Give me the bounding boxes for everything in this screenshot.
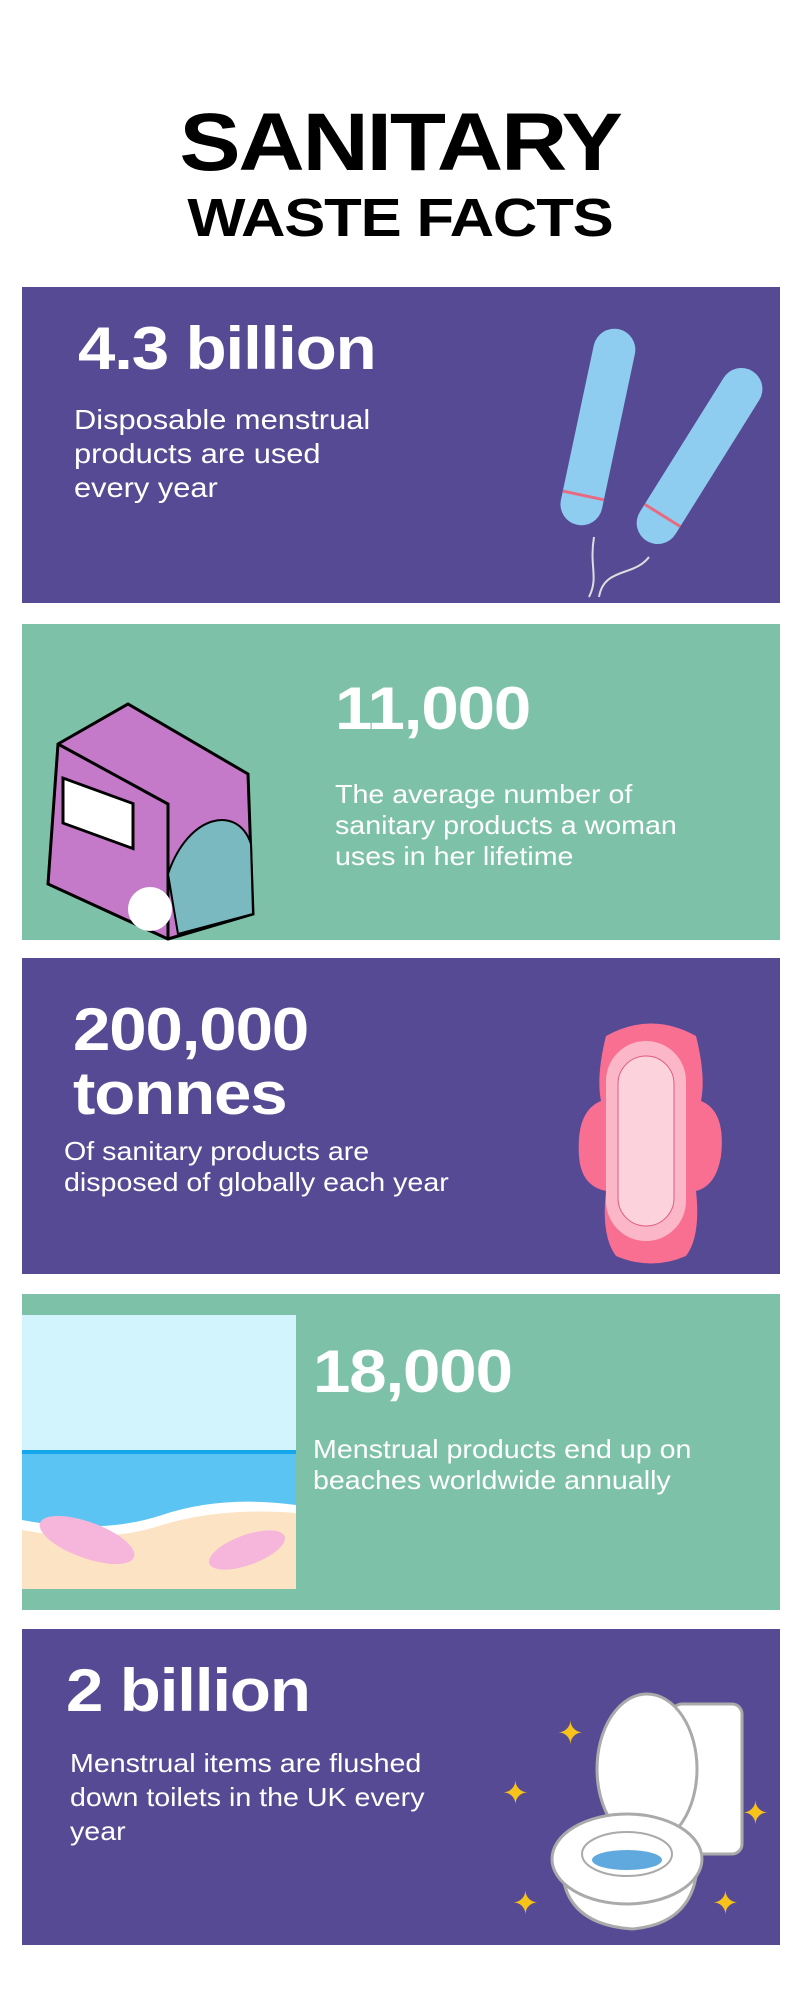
text: flushed: down toilets in the UK every (70, 1782, 425, 1812)
icon: toilet: ✦ (557, 1715, 584, 1751)
title: WASTE FACTS (187, 188, 613, 248)
text: beaches: beaches worldwide annually (313, 1465, 671, 1495)
text: disposed globally (64, 1136, 449, 1197)
stat: 11,000: 11,000 (335, 675, 530, 742)
text: flushed: Menstrual items are flushed (70, 1748, 421, 1778)
icon: toilet: ✦ (502, 1775, 529, 1811)
icon: toilet (502, 1692, 769, 1930)
stat: 2 billion: 2 billion (66, 1657, 310, 1724)
stat: 4.3 billion: 4.3 billion (78, 315, 376, 382)
panel: 4.3 billion (22, 287, 780, 603)
text: beaches: Menstrual products end up on (313, 1434, 691, 1464)
text: disposable products: Disposable menstrual (74, 404, 370, 435)
text: flushed: year (70, 1816, 126, 1846)
icon: toilet: ✦ (712, 1885, 739, 1921)
title (179, 97, 622, 248)
icon: pad (578, 1024, 722, 1264)
text: flushed (70, 1748, 425, 1846)
icon: pad package (46, 702, 255, 941)
stat: 200,000 tonnes: tonnes (73, 1060, 287, 1127)
text: average number: uses in her lifetime (335, 841, 573, 871)
panel: 11,000 (22, 624, 780, 940)
text: disposed globally: disposed of globally each year (64, 1167, 449, 1197)
text: disposable products: products are used (74, 438, 321, 469)
icon: toilet: ✦ (742, 1795, 769, 1831)
icon: toilet: ✦ (512, 1885, 539, 1921)
panel: 2 billion (22, 1629, 780, 1945)
icon: tampons (560, 328, 762, 598)
text: disposable products (74, 404, 370, 503)
stat: 18,000: 18,000 (313, 1338, 512, 1405)
text: average number (335, 779, 677, 871)
panel: 18,000 (22, 1294, 780, 1610)
text: beaches (313, 1434, 691, 1495)
text: disposable products: every year (74, 472, 218, 503)
icon: beach (22, 1315, 296, 1589)
text: disposed globally: Of sanitary products are (64, 1136, 369, 1166)
title: SANITARY (179, 97, 621, 188)
stat: 200,000 tonnes: 200,000 (73, 996, 308, 1063)
text: average number: sanitary products a woman (335, 810, 677, 840)
text: average number: The average number of (335, 779, 632, 809)
stat: 200,000 tonnes (73, 996, 308, 1127)
panel: 200,000 tonnes (22, 958, 780, 1274)
